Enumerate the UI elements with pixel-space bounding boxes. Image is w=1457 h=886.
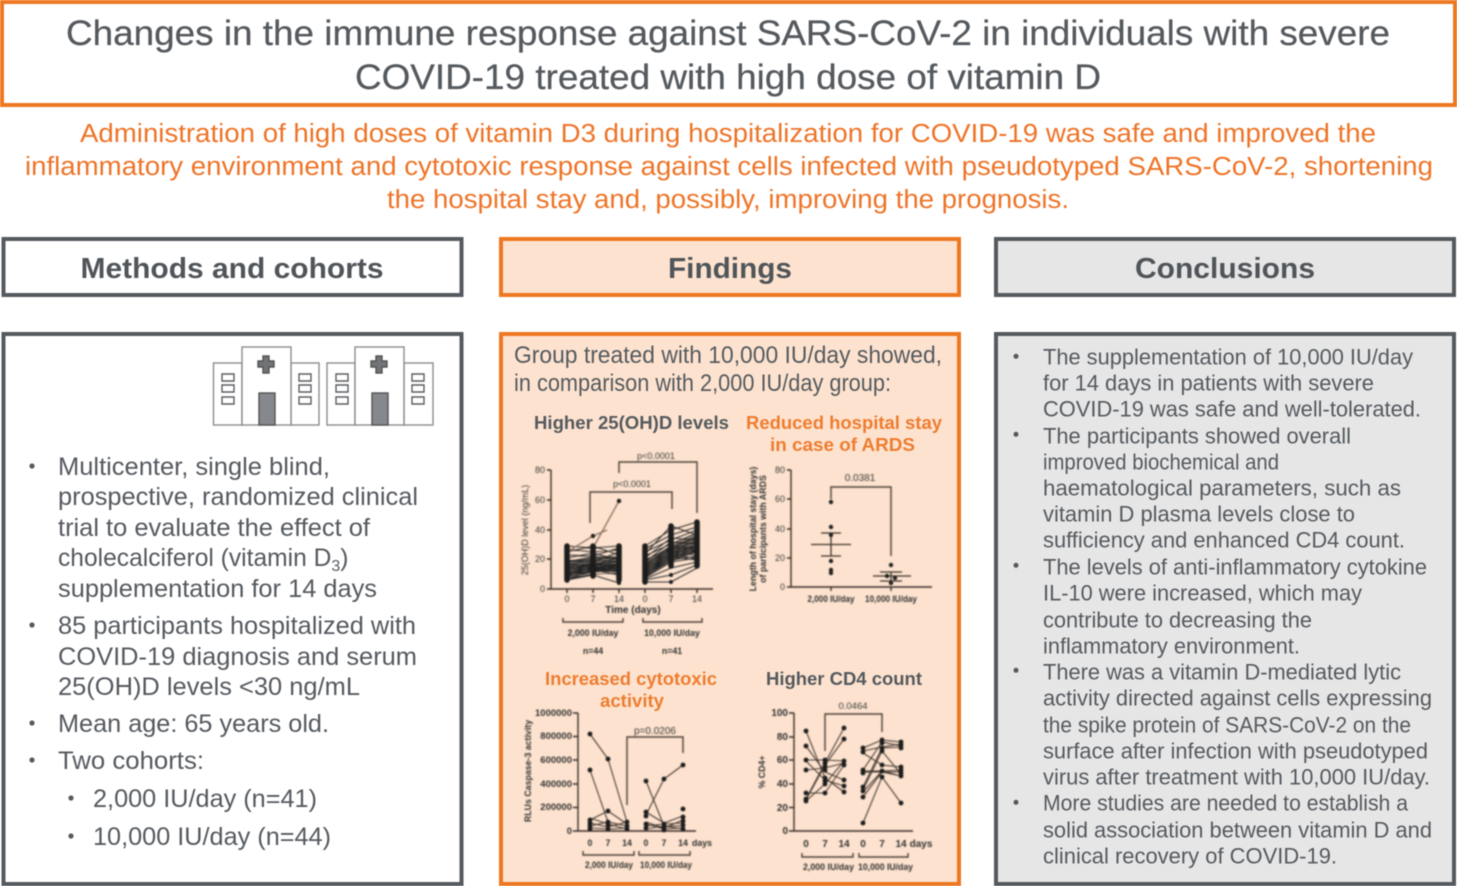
- bullet: two cohorts: 2,000 IU/day (n=41): [93, 786, 317, 813]
- chart: CD4 percentage: 0: [803, 839, 809, 850]
- conclusion: IL-10: [1014, 554, 1427, 658]
- heading: findings: [501, 239, 959, 295]
- summary statement: inflammatory environment and cytotoxic response against cells infected with pseudotyped SARS-CoV-2, shortening: [25, 151, 1433, 181]
- chart: 25(OH)D levels over time: 80: [535, 465, 545, 475]
- chart: CD4 percentage: % CD4+: [757, 755, 767, 789]
- conclusion: IL-10: contribute to decreasing the: [1043, 607, 1312, 632]
- chart heading: reduced hospital stay: [746, 413, 942, 455]
- chart: hospital stay scatter: [748, 465, 932, 604]
- chart: caspase-3 cytotoxic activity: 200000: [540, 802, 572, 813]
- conclusion: lytic activity: activity directed against cells expressing: [1043, 685, 1432, 710]
- chart: caspase-3 cytotoxic activity: 400000: [540, 779, 572, 790]
- chart: caspase-3 cytotoxic activity: [523, 708, 712, 870]
- chart: caspase-3 cytotoxic activity: 7: [606, 838, 611, 848]
- chart: hospital stay scatter: of participants with ARDS: [758, 475, 768, 583]
- chart: 25(OH)D levels over time: 20: [535, 554, 545, 564]
- conclusion: lytic activity: virus after treatment with 10,000 IU/day.: [1043, 764, 1430, 789]
- conclusion: safety: for 14 days in patients with severe: [1043, 370, 1374, 395]
- bullet: two cohorts: [29, 748, 331, 851]
- chart: CD4 percentage: days: [910, 839, 933, 850]
- chart: hospital stay scatter: 10,000 IU/day: [865, 594, 917, 604]
- chart: hospital stay scatter: 20: [775, 553, 785, 563]
- chart: caspase-3 cytotoxic activity: RLUs Caspase-3 activity: [523, 720, 533, 822]
- chart: hospital stay scatter: 0.0381: [845, 473, 876, 484]
- chart heading: higher 25(OH)D levels: Higher 25(OH)D levels: [534, 413, 729, 433]
- chart: CD4 percentage: 100: [771, 708, 788, 719]
- conclusion: parameters: vitamin D plasma levels close to: [1043, 501, 1355, 526]
- bullet: study design: ): [340, 545, 348, 572]
- bullet: participants: 25(OH)D levels <30 ng/mL: [58, 674, 360, 701]
- conclusion: IL-10: IL-10 were increased, which may: [1043, 580, 1363, 605]
- summary statement: the hospital stay and, possibly, improving the prognosis.: [387, 184, 1069, 214]
- chart: CD4 percentage: [757, 701, 933, 872]
- conclusion: lytic activity: There was a vitamin D-mediated lytic: [1043, 659, 1401, 684]
- chart: 25(OH)D levels over time: 7: [590, 594, 596, 604]
- chart: 25(OH)D levels over time: 25(OH)D level (ng/mL): [520, 485, 530, 575]
- conclusion: safety: The supplementation of 10,000 IU/day: [1043, 344, 1414, 369]
- bullet: study design: [29, 454, 418, 603]
- conclusion: lytic activity: the spike protein of SARS-CoV-2 on the: [1043, 712, 1411, 737]
- conclusion: lytic activity: surface after infection with pseudotyped: [1043, 738, 1428, 763]
- chart: CD4 percentage: 14: [838, 839, 850, 850]
- chart heading: increased cytotoxic activity: [545, 669, 717, 711]
- chart: caspase-3 cytotoxic activity: 10,000 IU/day: [640, 860, 692, 870]
- chart: CD4 percentage: 40: [777, 779, 788, 790]
- findings intro: in comparison with 2,000 IU/day group:: [514, 371, 891, 397]
- bullet: study design: prospective, randomized clinical: [58, 484, 418, 511]
- chart: CD4 percentage: 20: [777, 803, 788, 814]
- chart: 25(OH)D levels over time: 60: [535, 495, 545, 505]
- chart: 25(OH)D levels over time: 10,000 IU/day: [644, 628, 700, 638]
- chart: hospital stay scatter: 2,000 IU/day: [808, 594, 855, 604]
- chart: 25(OH)D levels over time: n=44: [583, 646, 603, 656]
- chart: caspase-3 cytotoxic activity: 600000: [540, 755, 572, 766]
- panel: conclusions: [996, 334, 1454, 884]
- title: COVID-19 treated with high dose of vitamin D: [355, 58, 1101, 97]
- conclusion: more studies: More studies are needed to establish a: [1043, 790, 1409, 815]
- chart: CD4 percentage: 7: [879, 839, 885, 850]
- bullet: mean age: Mean age: 65 years old.: [58, 711, 329, 738]
- conclusion: lytic activity: [1014, 659, 1432, 789]
- conclusion: parameters: [1014, 423, 1405, 552]
- chart: 25(OH)D levels over time: 40: [535, 525, 545, 535]
- chart: hospital stay scatter: 80: [775, 465, 785, 475]
- chart: caspase-3 cytotoxic activity: 1000000: [535, 708, 572, 719]
- chart: CD4 percentage: 60: [777, 755, 788, 766]
- heading: findings: Findings: [668, 253, 792, 285]
- conclusion: parameters: The participants showed overall: [1043, 423, 1351, 448]
- chart: 25(OH)D levels over time: p<0.0001: [613, 479, 651, 489]
- chart: caspase-3 cytotoxic activity: 800000: [540, 731, 572, 742]
- chart: 25(OH)D levels over time: 2,000 IU/day: [568, 628, 619, 638]
- conclusion: more studies: solid association between vitamin D and: [1043, 817, 1432, 842]
- bullet: two cohorts: Two cohorts:: [58, 748, 204, 775]
- bullet: study design: supplementation for 14 days: [58, 576, 377, 603]
- chart: hospital stay scatter: Length of hospital stay (days): [748, 467, 758, 591]
- bullet: participants: 85 participants hospitalized with: [58, 613, 416, 640]
- chart: CD4 percentage: 0: [782, 826, 788, 837]
- chart: caspase-3 cytotoxic activity: p=0.0206: [634, 726, 676, 737]
- chart: CD4 percentage: 0.0464: [838, 701, 868, 712]
- bullet: participants: [29, 613, 417, 701]
- findings intro: [514, 343, 942, 397]
- chart: caspase-3 cytotoxic activity: 14: [678, 838, 688, 848]
- summary statement: Administration of high doses of vitamin D3 during hospitalization for COVID-19 was safe and improved the: [80, 118, 1376, 148]
- chart: 25(OH)D levels over time: 14: [692, 594, 702, 604]
- chart: 25(OH)D levels over time: 0: [564, 594, 570, 604]
- chart: 25(OH)D levels over time: 14: [614, 594, 624, 604]
- conclusion: safety: COVID-19 was safe and well-tolerated.: [1043, 396, 1421, 421]
- chart heading: increased cytotoxic activity: Increased cytotoxic: [545, 669, 717, 689]
- chart: caspase-3 cytotoxic activity: 0: [567, 826, 572, 837]
- chart: CD4 percentage: 10,000 IU/day: [858, 862, 913, 872]
- chart: 25(OH)D levels over time: 0: [540, 584, 545, 594]
- chart: caspase-3 cytotoxic activity: 0: [588, 838, 593, 848]
- chart: 25(OH)D levels over time: [520, 451, 713, 656]
- chart: hospital stay scatter: 40: [775, 524, 785, 534]
- chart: caspase-3 cytotoxic activity: 0: [644, 838, 649, 848]
- heading: methods and cohorts: [4, 239, 462, 295]
- chart heading: reduced hospital stay: in case of ARDS: [770, 435, 915, 455]
- title: [2, 2, 1455, 105]
- chart: CD4 percentage: 80: [777, 732, 788, 743]
- chart: hospital stay scatter: 0: [780, 582, 785, 592]
- conclusion: parameters: sufficiency and enhanced CD4 count.: [1043, 527, 1405, 552]
- chart: caspase-3 cytotoxic activity: 2,000 IU/day: [585, 860, 633, 870]
- chart: caspase-3 cytotoxic activity: 14: [622, 838, 632, 848]
- heading: conclusions: Conclusions: [1135, 253, 1315, 285]
- bullet: study design: Multicenter, single blind,: [58, 454, 330, 481]
- conclusion: IL-10: The levels of anti-inflammatory cytokine: [1043, 554, 1427, 579]
- conclusion: more studies: clinical recovery of COVID-19.: [1043, 843, 1337, 868]
- chart: 25(OH)D levels over time: Time (days): [605, 605, 661, 616]
- chart: 25(OH)D levels over time: n=41: [662, 646, 682, 656]
- conclusion: parameters: haematological parameters, such as: [1043, 475, 1401, 500]
- title: Changes in the immune response against SARS-CoV-2 in individuals with severe: [66, 14, 1390, 53]
- chart: CD4 percentage: 14: [895, 839, 907, 850]
- chart heading: reduced hospital stay: Reduced hospital stay: [746, 413, 942, 433]
- heading: methods and cohorts: Methods and cohorts: [80, 253, 384, 285]
- chart: CD4 percentage: 0: [860, 839, 866, 850]
- chart: hospital stay scatter: 60: [775, 494, 785, 504]
- chart: CD4 percentage: 7: [822, 839, 828, 850]
- chart: 25(OH)D levels over time: 0: [642, 594, 648, 604]
- panel: findings: [501, 334, 959, 884]
- bullet: study design: trial to evaluate the effect of: [58, 515, 370, 542]
- conclusion: IL-10: inflammatory environment.: [1043, 633, 1300, 658]
- chart heading: higher CD4 count: Higher CD4 count: [766, 669, 922, 689]
- heading: conclusions: [996, 239, 1454, 295]
- summary statement: [25, 118, 1433, 214]
- bullet: participants: COVID-19 diagnosis and serum: [58, 644, 417, 671]
- chart: CD4 percentage: 2,000 IU/day: [803, 862, 854, 872]
- chart: caspase-3 cytotoxic activity: 7: [662, 838, 667, 848]
- bullet: study design: 3: [331, 558, 340, 575]
- chart: 25(OH)D levels over time: 7: [668, 594, 674, 604]
- conclusion: more studies: [1014, 790, 1432, 868]
- bullet: two cohorts: 10,000 IU/day (n=44): [93, 824, 331, 851]
- chart heading: increased cytotoxic activity: activity: [600, 691, 664, 711]
- conclusion: parameters: improved biochemical and: [1043, 449, 1279, 474]
- icon: hospitals: [214, 347, 433, 425]
- findings intro: Group treated with 10,000 IU/day showed,: [514, 343, 942, 369]
- chart: caspase-3 cytotoxic activity: days: [692, 838, 712, 848]
- chart: 25(OH)D levels over time: p<0.0001: [637, 451, 675, 461]
- conclusion: safety: [1014, 344, 1421, 421]
- panel: methods and cohorts: [4, 334, 462, 884]
- bullet: study design: cholecalciferol (vitamin D: [58, 545, 331, 572]
